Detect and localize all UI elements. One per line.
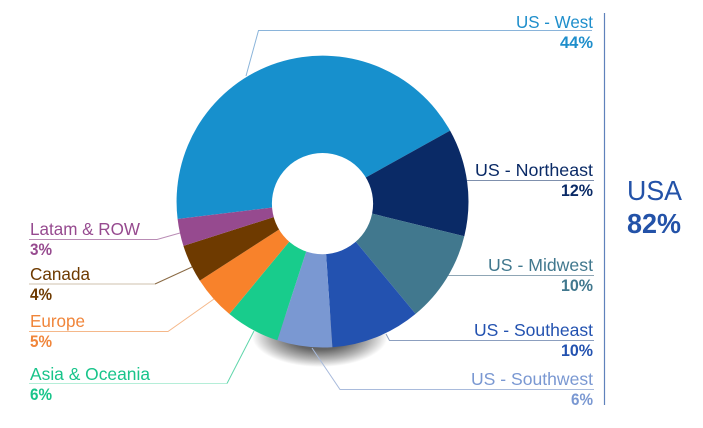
label: US - West — [516, 12, 593, 52]
label: US - Southwest: US - Southwest — [471, 369, 593, 389]
label: Canada — [30, 264, 90, 304]
slice: US - West 44% — [177, 56, 450, 219]
label: US - Southwest: 6% — [571, 390, 593, 409]
label: USA total: 82% — [627, 208, 681, 239]
label: US - Northeast — [475, 160, 593, 200]
label: US - West: US - West — [516, 12, 593, 32]
slice: Latam & ROW 3% — [178, 202, 322, 246]
label: USA total: USA — [627, 175, 682, 206]
label: US - West: 44% — [560, 33, 593, 52]
label: US - Northeast: US - Northeast — [475, 160, 593, 180]
label: Europe: 5% — [30, 332, 52, 351]
label: US - Midwest: US - Midwest — [488, 255, 593, 275]
label: Europe: Europe — [30, 311, 85, 331]
label: Asia & Oceania: 6% — [30, 385, 52, 404]
label: US - Southwest — [471, 369, 593, 409]
donut hole — [272, 153, 373, 254]
donut chart — [177, 56, 468, 348]
label: Asia & Oceania — [30, 364, 150, 404]
slice: US - Southwest 6% — [277, 202, 332, 348]
label: Latam & ROW: 3% — [30, 240, 52, 259]
label: US - Southeast — [474, 320, 593, 360]
label: USA total — [627, 175, 682, 239]
label: Canada: 4% — [30, 285, 52, 304]
label: Latam & ROW — [30, 219, 140, 259]
bracket line: USA total — [604, 13, 606, 405]
slice: Asia & Oceania 6% — [229, 202, 322, 340]
label: US - Midwest — [488, 255, 593, 295]
label: US - Midwest: 10% — [561, 276, 593, 295]
label: Europe — [30, 311, 85, 351]
label: Canada: Canada — [30, 264, 90, 284]
slice: US - Southeast 10% — [322, 202, 416, 347]
slice: Europe 5% — [200, 202, 322, 314]
leader lines — [29, 30, 594, 390]
label: US - Southeast: US - Southeast — [474, 320, 593, 340]
slice: US - Northeast 12% — [322, 131, 468, 236]
label: US - Southeast: 10% — [561, 341, 593, 360]
slice: Canada 4% — [183, 202, 322, 281]
label: US - Northeast: 12% — [561, 181, 593, 200]
slice: US - Midwest 10% — [322, 202, 464, 314]
label: Latam & ROW: Latam & ROW — [30, 219, 140, 239]
donut shadow — [252, 305, 388, 367]
label: Asia & Oceania: Asia & Oceania — [30, 364, 150, 384]
